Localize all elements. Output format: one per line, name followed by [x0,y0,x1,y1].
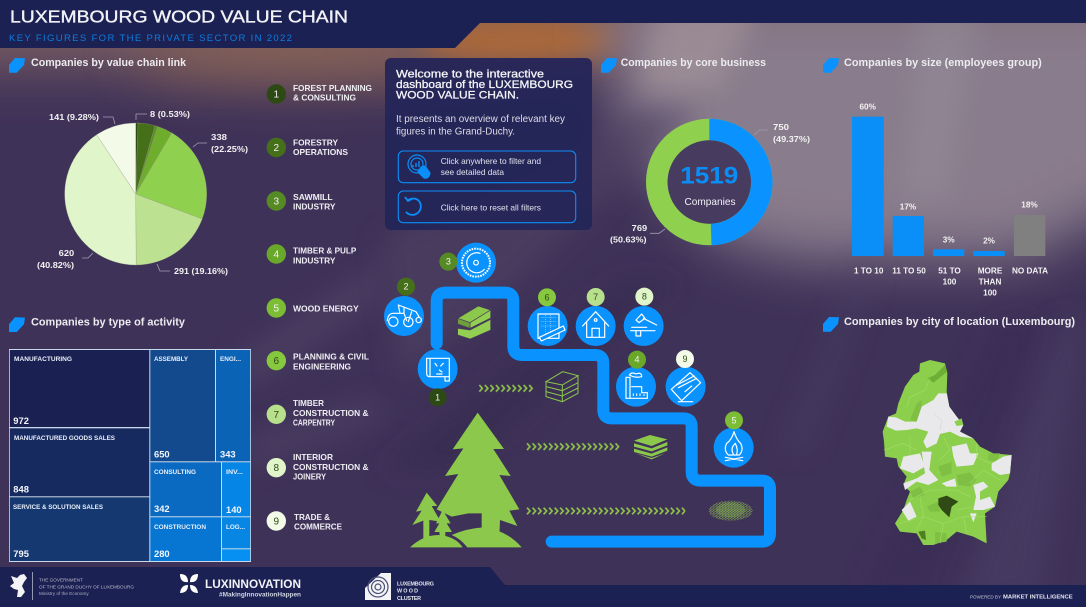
treemap: 140 [226,504,242,515]
treemap: 795 [13,548,29,559]
station 2: badge: 2 [403,282,408,292]
heading icon [9,58,25,73]
treemap: 342 [154,503,170,514]
bar chart: THAN [979,278,1001,287]
footer logo: Luxinnovation: #MakingInnovationHappen [219,592,301,599]
donut total: 1519 [680,162,738,189]
station 1: icon forest planning [418,349,458,389]
legend item 3: INDUSTRY [293,203,336,212]
legend item 7: CARPENTRY [293,418,335,427]
heading: Companies by city of location (Luxembourg) [844,316,1075,328]
icon: timber beams [458,306,491,339]
legend item 1: & CONSULTING [293,94,356,103]
treemap: 343 [220,449,236,460]
title: LUXEMBOURG WOOD VALUE CHAIN [10,7,348,27]
treemap: 972 [13,415,29,426]
icon: sawn planks block [546,372,578,402]
station 5: icon fire [714,428,754,468]
panel: legend of value chain links [267,84,372,531]
donut labels: (49.37%) [773,135,810,144]
welcome heading: WOOD VALUE CHAIN. [396,89,519,101]
header band [0,0,1086,48]
heading icon [823,317,839,332]
bar chart: MORE [978,267,1003,276]
station 3: badge: 3 [446,257,451,267]
Luxembourg City highlight [938,496,958,517]
chevrons middle [526,442,620,452]
station 3: badge [439,253,457,271]
station 4: badge: 4 [634,355,639,365]
powered by credit: POWERED BY [970,595,1001,600]
legend item 7: TIMBER [293,399,324,408]
legend item 9: 9 [274,516,280,528]
heading: Companies by size (employees group) [844,57,1042,69]
treemap [9,349,251,562]
legend item 7 [267,399,369,427]
station 9: badge [676,350,694,368]
pie labels [37,110,248,276]
legend item 4: 4 [274,250,280,260]
legend item 1: FOREST PLANNING [293,84,372,93]
chevrons bottom [526,506,685,516]
welcome body text: It presents an overview of relevant key [396,114,565,125]
bar chart: 1 TO 10 [854,267,884,276]
bar chart: 2% [983,237,996,246]
station 6: icon planning [528,306,568,346]
panel: welcome dashboard info [385,58,592,230]
legend item 5: WOOD ENERGY [293,305,359,314]
treemap: 848 [13,484,29,495]
station 7: icon house [576,306,616,346]
panel: companies by type of activity [9,317,251,562]
station 8: badge: 8 [642,292,647,302]
treemap: MANUFACTURED GOODS SALES [14,435,116,442]
legend item 6: PLANNING & CIVIL [293,352,369,361]
panel: companies by city of location [823,316,1075,545]
donut chart [657,130,762,234]
treemap: 280 [154,548,170,559]
treemap: CONSTRUCTION [154,524,206,531]
heading: Companies by value chain link [31,57,186,69]
footer logo: Luxembourg Wood Cluster [365,573,434,602]
bar chart: 100 [983,289,997,298]
bar chart: 100 [943,278,957,287]
station 1: badge: 1 [435,392,440,402]
legend item 1: 1 [274,89,280,100]
legend item 8: CONSTRUCTION & [293,463,369,472]
welcome heading: dashboard of the LUXEMBOURG [396,79,573,91]
legend item 2: 2 [274,143,280,154]
button: filter [398,151,576,183]
footer logo: government of Luxembourg: Ministry of the Economy [39,591,89,597]
station 6: badge: 6 [544,292,549,302]
legend item 8: 8 [274,463,280,474]
station 5: badge: 5 [731,415,736,425]
footer logo: government of Luxembourg [10,572,134,600]
legend item 7: 7 [274,410,280,421]
bar chart: 11 TO 50 [892,267,926,276]
icon: wood chips [709,501,753,521]
forest trees [410,413,522,547]
footer logo: Luxembourg Wood Cluster: WOOD [397,589,418,595]
pie labels: (40.82%) [37,261,74,270]
welcome body text [396,114,565,138]
button: filter: see detailed data [441,167,504,177]
blue path [437,293,770,542]
treemap: ENGI... [220,356,241,363]
bar chart: 60% [860,102,877,111]
value chain diagram [384,243,770,547]
legend item 9: COMMERCE [294,522,343,531]
station 2: badge [397,278,415,296]
bar chart: 51 TO [938,267,961,276]
station 6: badge [538,288,556,306]
station 9: badge: 9 [682,354,687,364]
legend item 1 [267,84,372,104]
welcome heading [396,69,573,101]
footer logo: Luxinnovation [180,574,301,599]
button: filter: Click anywhere to filter and [441,156,541,166]
donut labels: (50.63%) [610,236,647,245]
legend item 4: INDUSTRY [293,256,336,265]
treemap: ASSEMBLY [154,356,189,363]
welcome body text: figures in the Grand-Duchy. [396,127,515,138]
icon: petals [180,574,198,593]
footer band [0,567,1086,607]
station 3: icon saw blade [456,243,496,283]
legend item 5 [267,298,359,318]
treemap: INV... [226,469,243,476]
pie labels: 291 (19.16%) [174,267,228,276]
legend item 8 [267,453,369,481]
pie chart [65,123,207,265]
footer logo: Luxembourg Wood Cluster: CLUSTER [397,596,421,602]
heading icon [823,58,839,73]
station 7: badge [587,288,605,306]
station 9: icon credit card [666,367,706,407]
legend item 3: 3 [274,196,280,208]
station 8: badge [635,288,653,306]
legend item 3: SAWMILL [293,193,333,202]
donut labels: 769 [632,224,648,233]
legend item 6: ENGINEERING [293,362,351,371]
treemap: MANUFACTURING [14,356,72,363]
bar chart: 17% [900,202,917,211]
pie labels: 620 [59,249,75,258]
legend item 6 [267,351,369,371]
chevrons top [478,383,534,393]
bar chart: NO DATA [1012,267,1048,276]
donut labels [610,123,810,245]
bar chart: 3% [943,236,955,245]
donut center fill [668,140,751,224]
pie labels: (22.25%) [211,145,248,154]
icon: wood rings [365,573,391,600]
station 4: icon factory [616,367,656,407]
treemap: SERVICE & SOLUTION SALES [13,504,104,511]
welcome heading: Welcome to the interactive [396,69,544,81]
legend item 2 [267,138,349,157]
heading icon [9,317,25,332]
treemap: 650 [154,449,170,460]
pie labels: 8 (0.53%) [150,110,190,119]
icon: reset arrow [405,197,421,215]
pie labels: 338 [211,133,228,142]
station 8: icon hammer [624,306,664,346]
legend item 8: JOINERY [293,472,326,481]
powered by credit [970,595,1073,601]
bar chart [852,102,1048,298]
treemap: CONSULTING [154,469,196,476]
legend item 9: TRADE & [294,513,330,522]
station 2: icon forestry machine [384,296,424,336]
button: reset: Click here to reset all filters [441,203,541,213]
footer logo: Luxembourg Wood Cluster: LUXEMBOURG [397,582,434,588]
heading icon [601,58,617,73]
legend item 8: INTERIOR [293,453,333,462]
footer logo: Luxinnovation: LUXINNOVATION [205,577,301,591]
icon: touch chart [408,155,430,178]
legend item 2: OPERATIONS [293,148,349,157]
bar chart: 18% [1021,201,1038,210]
icon: wood sheets [634,435,667,459]
station 1: badge [429,388,447,406]
legend item 6: 6 [274,356,280,367]
treemap: LOG... [226,524,245,531]
legend item 9 [267,511,343,531]
map of Luxembourg [883,360,1012,545]
pie labels: 141 (9.28%) [49,113,99,122]
donut total: Companies [684,196,736,208]
panel: companies by core business [601,57,810,245]
legend item 5: 5 [274,304,280,314]
powered by credit: MARKET INTELLIGENCE [1003,595,1073,601]
station 4: badge [628,351,646,369]
legend item 7: CONSTRUCTION & [293,409,369,418]
heading: Companies by type of activity [31,317,185,329]
legend item 4: TIMBER & PULP [293,246,357,255]
donut labels: 750 [773,123,790,132]
legend item 4 [267,244,357,265]
station 7: badge: 7 [593,292,598,302]
button: reset [398,191,576,223]
heading: Companies by core business [621,57,766,69]
footer logo: government of Luxembourg: THE GOVERNMENT [39,578,83,583]
icon: lion [10,574,27,597]
panel: companies by size [823,57,1048,298]
donut total [680,162,738,208]
legend item 2: FORESTRY [293,138,339,147]
footer logo: government of Luxembourg: OF THE GRAND DUCHY OF LUXEMBOURG [39,584,134,589]
station 5: badge [725,411,743,429]
panel: companies by value chain link [9,57,248,276]
legend item 3 [267,191,336,212]
subtitle: KEY FIGURES FOR THE PRIVATE SECTOR IN 2022 [9,33,292,44]
